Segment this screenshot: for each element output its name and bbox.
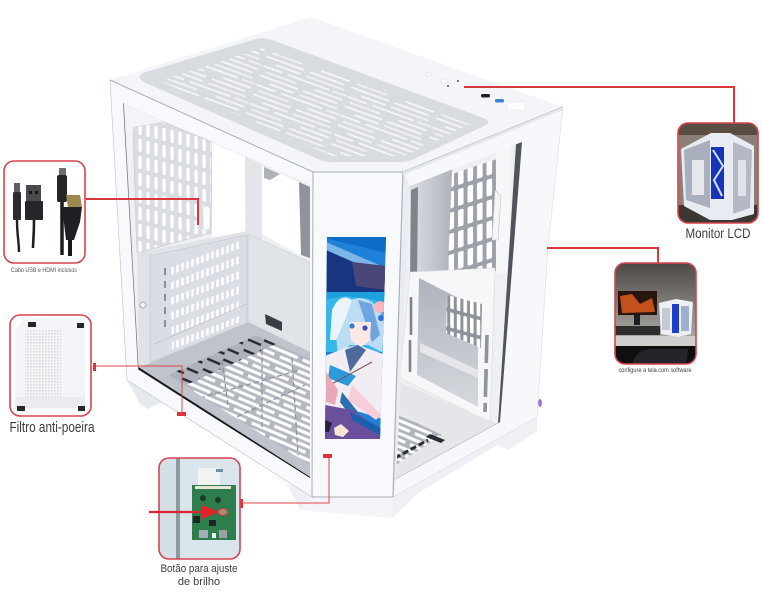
perforated motherboard tray [133,122,212,253]
right window interior [392,140,527,485]
side openings [212,143,245,242]
icon: USB-A cable [25,185,43,248]
caption: software: configure a tela com software [618,367,692,374]
circuit board [192,485,236,540]
LCD screen artwork [325,237,386,439]
leader line: dust filter [93,363,186,416]
dark glass edge [498,141,523,424]
upper perforated plate [448,159,496,271]
mini case [681,133,754,220]
icon: HDMI cable [62,195,82,256]
icon: micro HDMI cable [57,168,67,255]
purple RGB light [538,399,542,407]
caption: cables: Cabo USB e HDMI inclusos [11,268,77,274]
left side frame [110,80,313,497]
face [349,322,371,348]
floor right [396,383,496,478]
panel: brightness button board [159,455,242,563]
flower [374,301,384,313]
label: dust filter: Filtro anti-poeira [10,420,95,436]
leader line: top panel to Monitor LCD [464,87,734,123]
arrow: points to brightness button [149,505,219,519]
hair [336,298,384,356]
right side frame [393,107,563,497]
skirt [325,405,382,441]
label: brightness button: de brilho [178,576,220,588]
leader line: brightness button [240,454,332,508]
PSU wall [248,234,310,355]
desk [616,336,696,346]
label: Monitor LCD: Monitor LCD [686,225,750,241]
ribbon cable [198,468,220,486]
panel: dust filter [10,315,91,416]
label: brightness button: Botão para ajuste [160,563,238,575]
monitor on desk [615,291,660,335]
panel: software setup photo [615,263,697,366]
top IO buttons and ports [426,73,525,110]
mini case [659,299,693,337]
panel: Monitor LCD photo [678,123,758,225]
front panel [312,172,410,497]
lower holes [446,295,482,348]
lower frame and opening [400,268,495,422]
panel: USB and HDMI cables [4,161,85,263]
left window interior [120,100,315,485]
top panel [110,17,563,175]
icon: USB-C cable [13,183,21,252]
leader line: USB cables [86,199,198,225]
kimono [325,345,386,420]
leader line: software [547,248,658,263]
top mesh filter [140,38,488,162]
computer case [110,17,563,518]
expansion slots wall [137,231,248,368]
floor [138,322,310,480]
base and feet [127,380,537,518]
